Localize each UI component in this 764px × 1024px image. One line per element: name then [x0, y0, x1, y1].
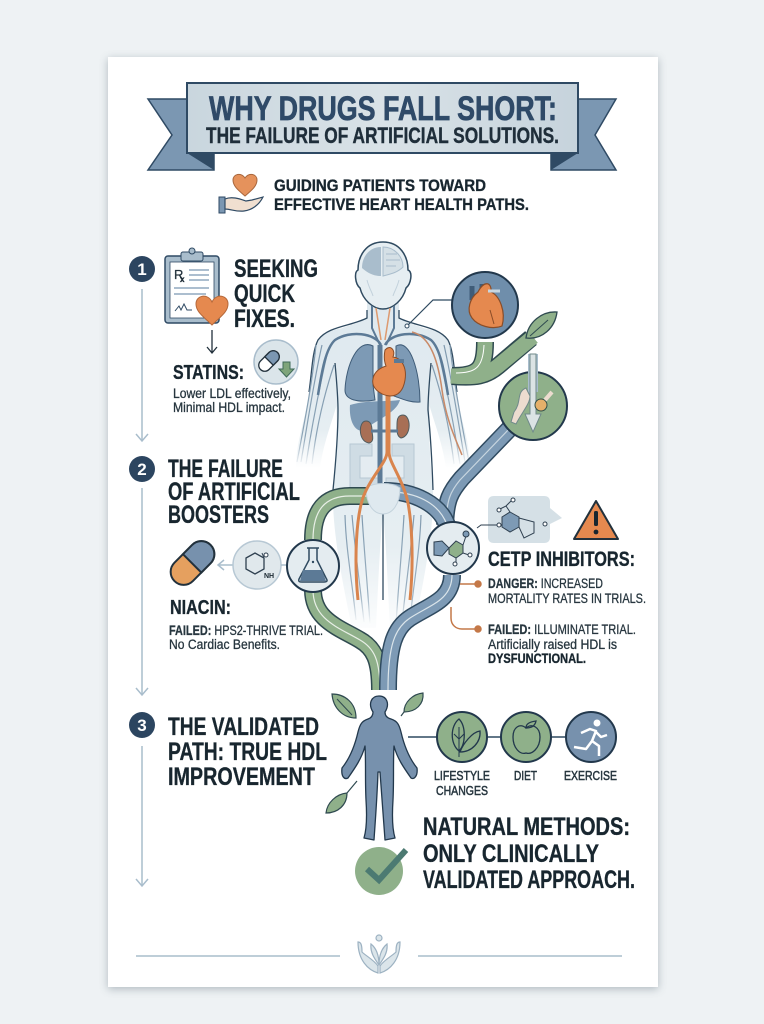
- natural methods statement: NATURAL METHODS:: [423, 813, 630, 841]
- statins text block: STATINS:: [173, 362, 244, 384]
- icon: warning triangle: [574, 501, 618, 539]
- central vein: [378, 345, 382, 490]
- leg nerves: [345, 515, 421, 625]
- arrow: molecule to capsule: [218, 560, 233, 570]
- arrow: clipboard to statins: [207, 330, 217, 353]
- title banner: [148, 83, 616, 170]
- liver: [350, 400, 400, 431]
- ribbon right fold: [551, 153, 578, 170]
- icon: lifestyle changes: [437, 712, 487, 762]
- statins text block: Minimal HDL impact.: [173, 400, 285, 415]
- blue pipe: [384, 491, 452, 690]
- icon labels: CHANGES: [436, 783, 488, 798]
- statins text block: Lower LDL effectively,: [173, 386, 291, 401]
- subtitle: [274, 176, 529, 214]
- central heart and arteries: [356, 348, 412, 600]
- natural methods statement: [423, 813, 635, 894]
- human body anatomy: [296, 242, 470, 628]
- natural methods statement: VALIDATED APPROACH.: [423, 866, 635, 894]
- icon labels: [434, 768, 617, 798]
- step 2 heading: OF ARTIFICIAL: [168, 478, 300, 506]
- title line 1: WHY DRUGS FALL SHORT:: [209, 90, 557, 128]
- icon: niacin molecule: [233, 541, 281, 589]
- step 2 number and timeline arrow: [129, 456, 155, 695]
- right arm artery: [412, 332, 462, 455]
- title line 2: THE FAILURE OF ARTIFICIAL SOLUTIONS.: [206, 123, 559, 148]
- step 1 heading: QUICK: [234, 280, 295, 308]
- connector to lifestyle icons: [408, 736, 570, 738]
- kidneys: [360, 415, 409, 443]
- banner panel: [187, 83, 578, 153]
- icon labels: DIET: [514, 768, 537, 783]
- icon: diet apple: [501, 712, 551, 762]
- CETP inhibitors text block: [488, 548, 646, 666]
- pipe fill: [451, 337, 533, 377]
- niacin text block: NIACIN:: [170, 597, 231, 619]
- step 2 heading: THE FAILURE: [168, 455, 283, 483]
- icon: molecule speech bubble: [477, 496, 562, 543]
- CETP inhibitors text block: CETP INHIBITORS:: [488, 548, 635, 571]
- pipe outline: [452, 338, 531, 377]
- step 1 heading: [234, 255, 318, 333]
- CETP inhibitors text block: MORTALITY RATES IN TRIALS.: [488, 591, 646, 606]
- niacin text block: No Cardiac Benefits.: [169, 637, 280, 652]
- icon labels: LIFESTYLE: [434, 768, 490, 783]
- step 2 heading: [168, 455, 300, 529]
- subtitle: EFFECTIVE HEART HEALTH PATHS.: [274, 195, 529, 214]
- icon: footer hands logo: [358, 935, 400, 973]
- icon: heart circle with leader: [405, 272, 518, 338]
- icon: clipboard prescription with heart: x: [180, 275, 185, 284]
- face shading: [367, 280, 399, 296]
- icon: flask circle: [287, 540, 339, 592]
- niacin text block: [169, 597, 323, 652]
- subtitle: GUIDING PATIENTS TOWARD: [274, 176, 486, 195]
- shoulder veins: [318, 334, 448, 395]
- step 3 heading: PATH: TRUE HDL: [168, 738, 327, 766]
- icon: validated check: [355, 847, 406, 895]
- CETP inhibitors text block: DYSFUNCTIONAL.: [488, 651, 586, 666]
- arm nerves: [297, 345, 469, 464]
- human figure: [342, 696, 417, 840]
- intestines: [350, 444, 414, 490]
- icon: heart in hand: [219, 174, 263, 213]
- step 2 heading: BOOSTERS: [168, 501, 269, 529]
- natural methods statement: ONLY CLINICALLY: [423, 840, 599, 868]
- arms silhouette: [296, 328, 470, 468]
- step 1 heading: SEEKING: [234, 255, 318, 283]
- right lung: [394, 345, 420, 402]
- ribbon left tail: [148, 99, 214, 170]
- neck vessels: [372, 306, 394, 345]
- CETP inhibitors text block: Artificially raised HDL is: [488, 637, 617, 652]
- step 3 heading: THE VALIDATED: [168, 713, 319, 741]
- step 1 number and timeline arrow: [129, 256, 155, 441]
- step 2 number and timeline arrow: 2: [137, 460, 147, 479]
- green branch to heart and leaf: [451, 337, 533, 377]
- footer divider lines: [136, 955, 622, 957]
- niacin text block: FAILED: HPS2-THRIVE TRIAL.: [169, 623, 323, 638]
- body outline: [309, 310, 457, 600]
- pelvis: [366, 484, 400, 514]
- CETP inhibitors text block: FAILED: ILLUMINATE TRIAL.: [488, 622, 636, 637]
- step 3 heading: [168, 713, 327, 791]
- icon: niacin molecule: NH: [264, 573, 274, 580]
- icon: clipboard prescription with heart: R: [174, 267, 183, 282]
- leaf: [526, 312, 557, 338]
- icon: statin pill with down arrow: [254, 340, 298, 384]
- icon: clipboard prescription with heart: [165, 248, 228, 325]
- ribbon left fold: [187, 153, 214, 170]
- step 3 number and timeline arrow: [129, 712, 155, 886]
- statins text block: [173, 362, 291, 415]
- leaves around figure: [326, 693, 423, 813]
- step 3 number and timeline arrow: 3: [137, 716, 147, 735]
- step 3 heading: IMPROVEMENT: [168, 763, 315, 791]
- torso and legs silhouette: [333, 300, 433, 628]
- left lung: [345, 345, 375, 401]
- pipe network: [313, 491, 452, 690]
- orange callout connectors: [451, 581, 481, 632]
- icon labels: EXERCISE: [564, 768, 617, 783]
- icon: green digestive circle: [499, 354, 567, 440]
- ribbon right tail: [551, 99, 616, 170]
- blue pipe upper branch: [445, 424, 514, 525]
- icon: exercise runner: [566, 712, 616, 762]
- green pipe: [313, 496, 382, 690]
- CETP inhibitors text block: DANGER: INCREASED: [488, 576, 603, 591]
- pipe highlight: [456, 345, 484, 373]
- connector: flask to molecule: [281, 564, 287, 566]
- brain: [362, 247, 381, 276]
- step 1 heading: FIXES.: [234, 305, 295, 333]
- icon: niacin capsule: [165, 536, 220, 590]
- icon: CETP molecule circle: [427, 522, 479, 574]
- head: [356, 242, 411, 309]
- panel: white card: [108, 57, 658, 987]
- step 1 number and timeline arrow: 1: [137, 260, 147, 279]
